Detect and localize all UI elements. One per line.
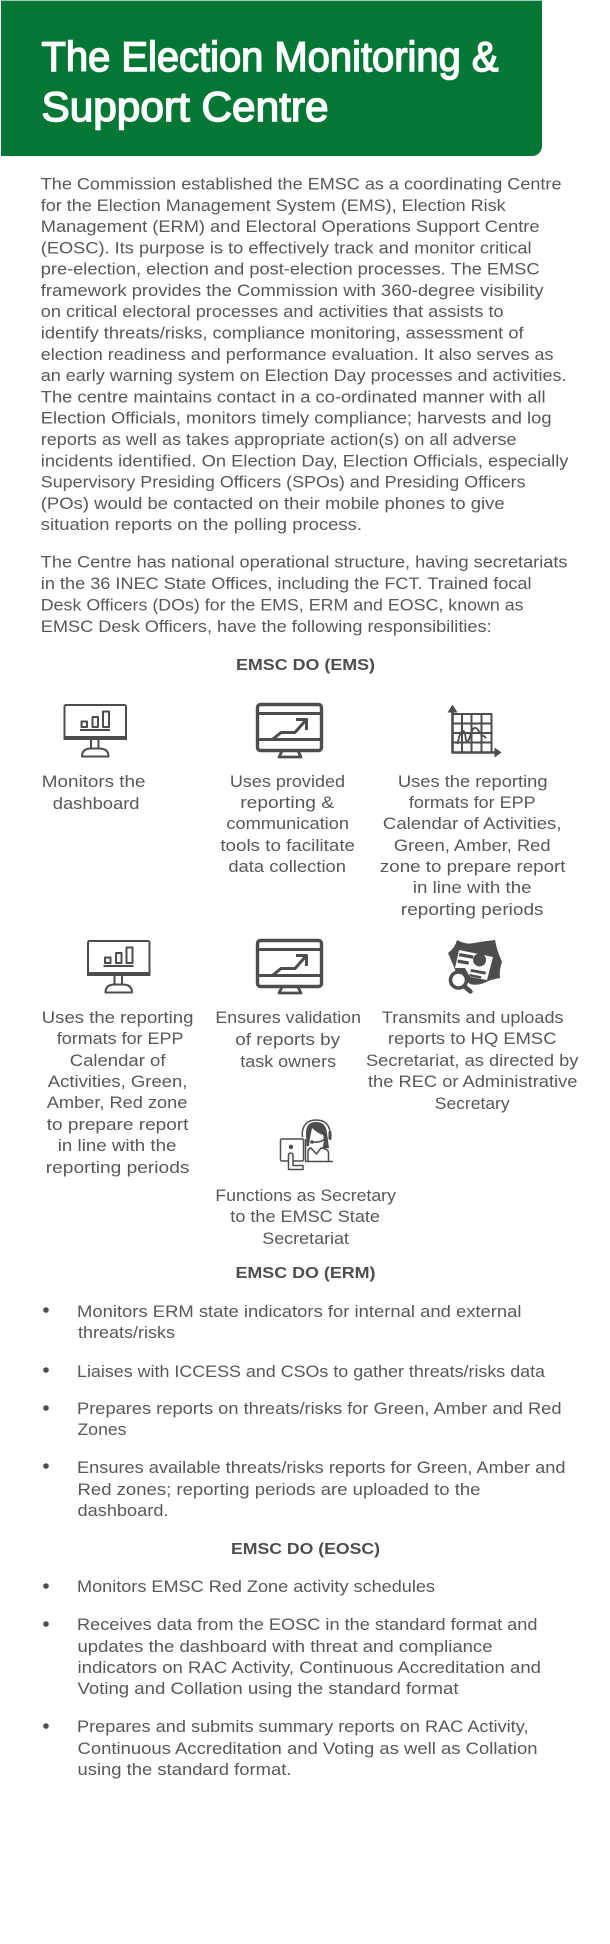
caption: transmits and uploads [366, 1009, 579, 1113]
heading: EMSC DO (EOSC): EMSC DO (EOSC) [231, 1541, 380, 1558]
caption: uses the reporting formats, second: formats for EPP [57, 1030, 183, 1048]
caption: uses the reporting formats, first: Calendar of Activities, [383, 815, 561, 833]
caption: uses provided reporting tools: communication [226, 815, 349, 833]
caption: uses provided reporting tools: data collection [228, 858, 346, 876]
title: The Election Monitoring & [42, 33, 498, 80]
bullet item: prepares reports: Zones [78, 1421, 126, 1439]
caption: functions as secretary: to the EMSC State [230, 1208, 380, 1226]
title: Support Centre [42, 83, 328, 130]
caption: uses the reporting formats, first: zone to prepare report [380, 858, 566, 876]
intro paragraph: reports as well as takes appropriate action(s) on all adverse [41, 431, 517, 449]
list: ERM responsibilities [43, 1303, 565, 1520]
heading: EMSC DO (ERM): EMSC DO (ERM) [236, 1265, 376, 1282]
intro paragraph: The Commission established the EMSC as a coordinating Centre [41, 175, 561, 194]
title [42, 33, 498, 130]
bullet item: monitors ERM indicators: threats/risks [78, 1324, 175, 1342]
bullet item: receives data: Receives data from the EOSC in the standard format and [77, 1616, 538, 1634]
bullet item: receives data: indicators on RAC Activity, Continuous Accreditation and [78, 1659, 541, 1677]
caption: uses the reporting formats, second [42, 1009, 193, 1177]
intro paragraph: identify threats/risks, compliance monitoring, assessment of [41, 324, 524, 343]
icon: secretary with headset at computer [280, 1120, 333, 1170]
bullet item: prepares summary reports [43, 1718, 537, 1779]
icon: chart monitor 1 [258, 704, 322, 757]
bullet item: receives data: updates the dashboard with threat and compliance [78, 1638, 493, 1656]
icon: dashboard monitor 2 [87, 941, 150, 992]
bullet item: monitors ERM indicators [43, 1303, 521, 1342]
bullet item: ensures available reports: Ensures available threats/risks reports for Green, Amber and [77, 1459, 566, 1477]
caption: transmits and uploads: Secretary [435, 1095, 510, 1113]
bullet item: prepares reports: Prepares reports on threats/risks for Green, Amber and Red [77, 1400, 562, 1418]
bullet item: ensures available reports: dashboard. [78, 1502, 168, 1520]
intro paragraph: Management (ERM) and Electoral Operations Support Centre [41, 218, 540, 236]
bullet item: prepares reports [43, 1400, 561, 1439]
caption: uses the reporting formats, second: Amber, Red zone [47, 1094, 187, 1112]
header banner [1, 1, 542, 156]
second paragraph: The Centre has national operational structure, having secretariats [41, 553, 567, 572]
bullet item: monitors red zone schedules: Monitors EMSC Red Zone activity schedules [77, 1578, 435, 1596]
caption: monitors the dashboard: Monitors the [42, 773, 146, 791]
bullet item: receives data: Voting and Collation using the standard format [78, 1680, 459, 1698]
caption: ensures validation: Ensures validation [215, 1009, 361, 1027]
bullet item: prepares summary reports: Continuous Accreditation and Voting as well as Collation [78, 1740, 538, 1758]
caption: uses the reporting formats, first: reporting periods [401, 901, 544, 919]
heading: EMSC DO (EMS): EMSC DO (EMS) [236, 657, 375, 674]
bullet item: monitors ERM indicators: Monitors ERM state indicators for internal and external [77, 1303, 522, 1321]
caption: uses the reporting formats, first: Green, Amber, Red [394, 837, 551, 855]
caption: ensures validation [215, 1009, 361, 1071]
intro paragraph: (POs) would be contacted on their mobile phones to give [41, 495, 505, 513]
bullet item: ensures available reports [43, 1459, 565, 1520]
caption: uses the reporting formats, first: Uses the reporting [398, 773, 548, 791]
intro paragraph: pre-election, election and post-election processes. The EMSC [41, 261, 540, 279]
caption: transmits and uploads: Secretariat, as directed by [366, 1052, 579, 1070]
caption: uses provided reporting tools: reporting & [240, 794, 334, 812]
caption: ensures validation: task owners [240, 1053, 336, 1071]
caption: uses the reporting formats, second: to prepare report [47, 1116, 189, 1134]
caption: uses the reporting formats, second: Activities, Green, [48, 1073, 187, 1091]
caption: transmits and uploads: the REC or Administrative [368, 1073, 577, 1091]
intro paragraph: on critical electoral processes and activities that assists to [41, 303, 504, 321]
bullet item: prepares summary reports: using the standard format. [78, 1761, 292, 1779]
second paragraph [41, 553, 567, 636]
bullet item: receives data [43, 1616, 541, 1698]
bullet item: prepares summary reports: Prepares and submits summary reports on RAC Activity, [77, 1718, 528, 1736]
intro paragraph: Election Officials, monitors timely compliance; harvests and log [41, 410, 552, 428]
intro paragraph: incidents identified. On Election Day, Election Officials, especially [41, 452, 569, 470]
icon: dashboard monitor 1 [64, 705, 127, 756]
second paragraph: Desk Officers (DOs) for the EMS, ERM and EOSC, known as [41, 596, 524, 615]
caption: uses provided reporting tools: Uses provided [230, 773, 345, 791]
caption: transmits and uploads: Transmits and uploads [382, 1009, 563, 1027]
caption: transmits and uploads: reports to HQ EMSC [388, 1030, 557, 1048]
intro paragraph: Supervisory Presiding Officers (SPOs) and Presiding Officers [41, 474, 526, 492]
caption: ensures validation: of reports by [235, 1031, 341, 1049]
intro paragraph: an early warning system on Election Day processes and activities. [41, 367, 566, 385]
caption: uses the reporting formats, first: formats for EPP [409, 794, 536, 812]
bullet item: ensures available reports: Red zones; reporting periods are uploaded to the [78, 1481, 480, 1499]
intro paragraph: The centre maintains contact in a co-ordinated manner with all [41, 388, 546, 406]
caption: uses the reporting formats, second: in line with the [58, 1137, 176, 1155]
intro paragraph: election readiness and performance evaluation. It also serves as [41, 346, 554, 364]
icon: chart monitor 2 [258, 940, 322, 993]
intro paragraph [41, 175, 569, 534]
bullet item: liaises with ICCESS: Liaises with ICCESS and CSOs to gather threats/risks data [77, 1363, 546, 1381]
caption: uses the reporting formats, first: in line with the [413, 879, 532, 897]
caption: uses provided reporting tools [220, 773, 355, 876]
list: EOSC responsibilities [43, 1578, 541, 1779]
green banner shape [1, 1, 542, 156]
caption: functions as secretary: Secretariat [262, 1230, 349, 1248]
caption: functions as secretary: Functions as Secretary [215, 1187, 397, 1205]
icon: line chart on grid 1 [448, 704, 502, 758]
second paragraph: in the 36 INEC State Offices, including the FCT. Trained focal [41, 575, 532, 593]
caption: uses the reporting formats, second: reporting periods [46, 1159, 189, 1177]
caption: uses the reporting formats, second: Calendar of [70, 1052, 166, 1070]
caption: functions as secretary [215, 1187, 397, 1248]
caption: uses the reporting formats, second: Uses the reporting [42, 1009, 193, 1027]
caption: uses provided reporting tools: tools to facilitate [220, 837, 355, 855]
caption: monitors the dashboard: dashboard [53, 795, 140, 813]
caption: monitors the dashboard [42, 773, 146, 813]
intro paragraph: framework provides the Commission with 360-degree visibility [41, 282, 544, 300]
second paragraph: EMSC Desk Officers, have the following responsibilities: [41, 618, 492, 636]
intro paragraph: situation reports on the polling process. [41, 516, 362, 534]
caption: uses the reporting formats, first [380, 773, 566, 919]
intro paragraph: (EOSC). Its purpose is to effectively track and monitor critical [41, 239, 532, 257]
icon: report with magnifier [448, 940, 502, 992]
intro paragraph: for the Election Management System (EMS), Election Risk [41, 197, 506, 215]
